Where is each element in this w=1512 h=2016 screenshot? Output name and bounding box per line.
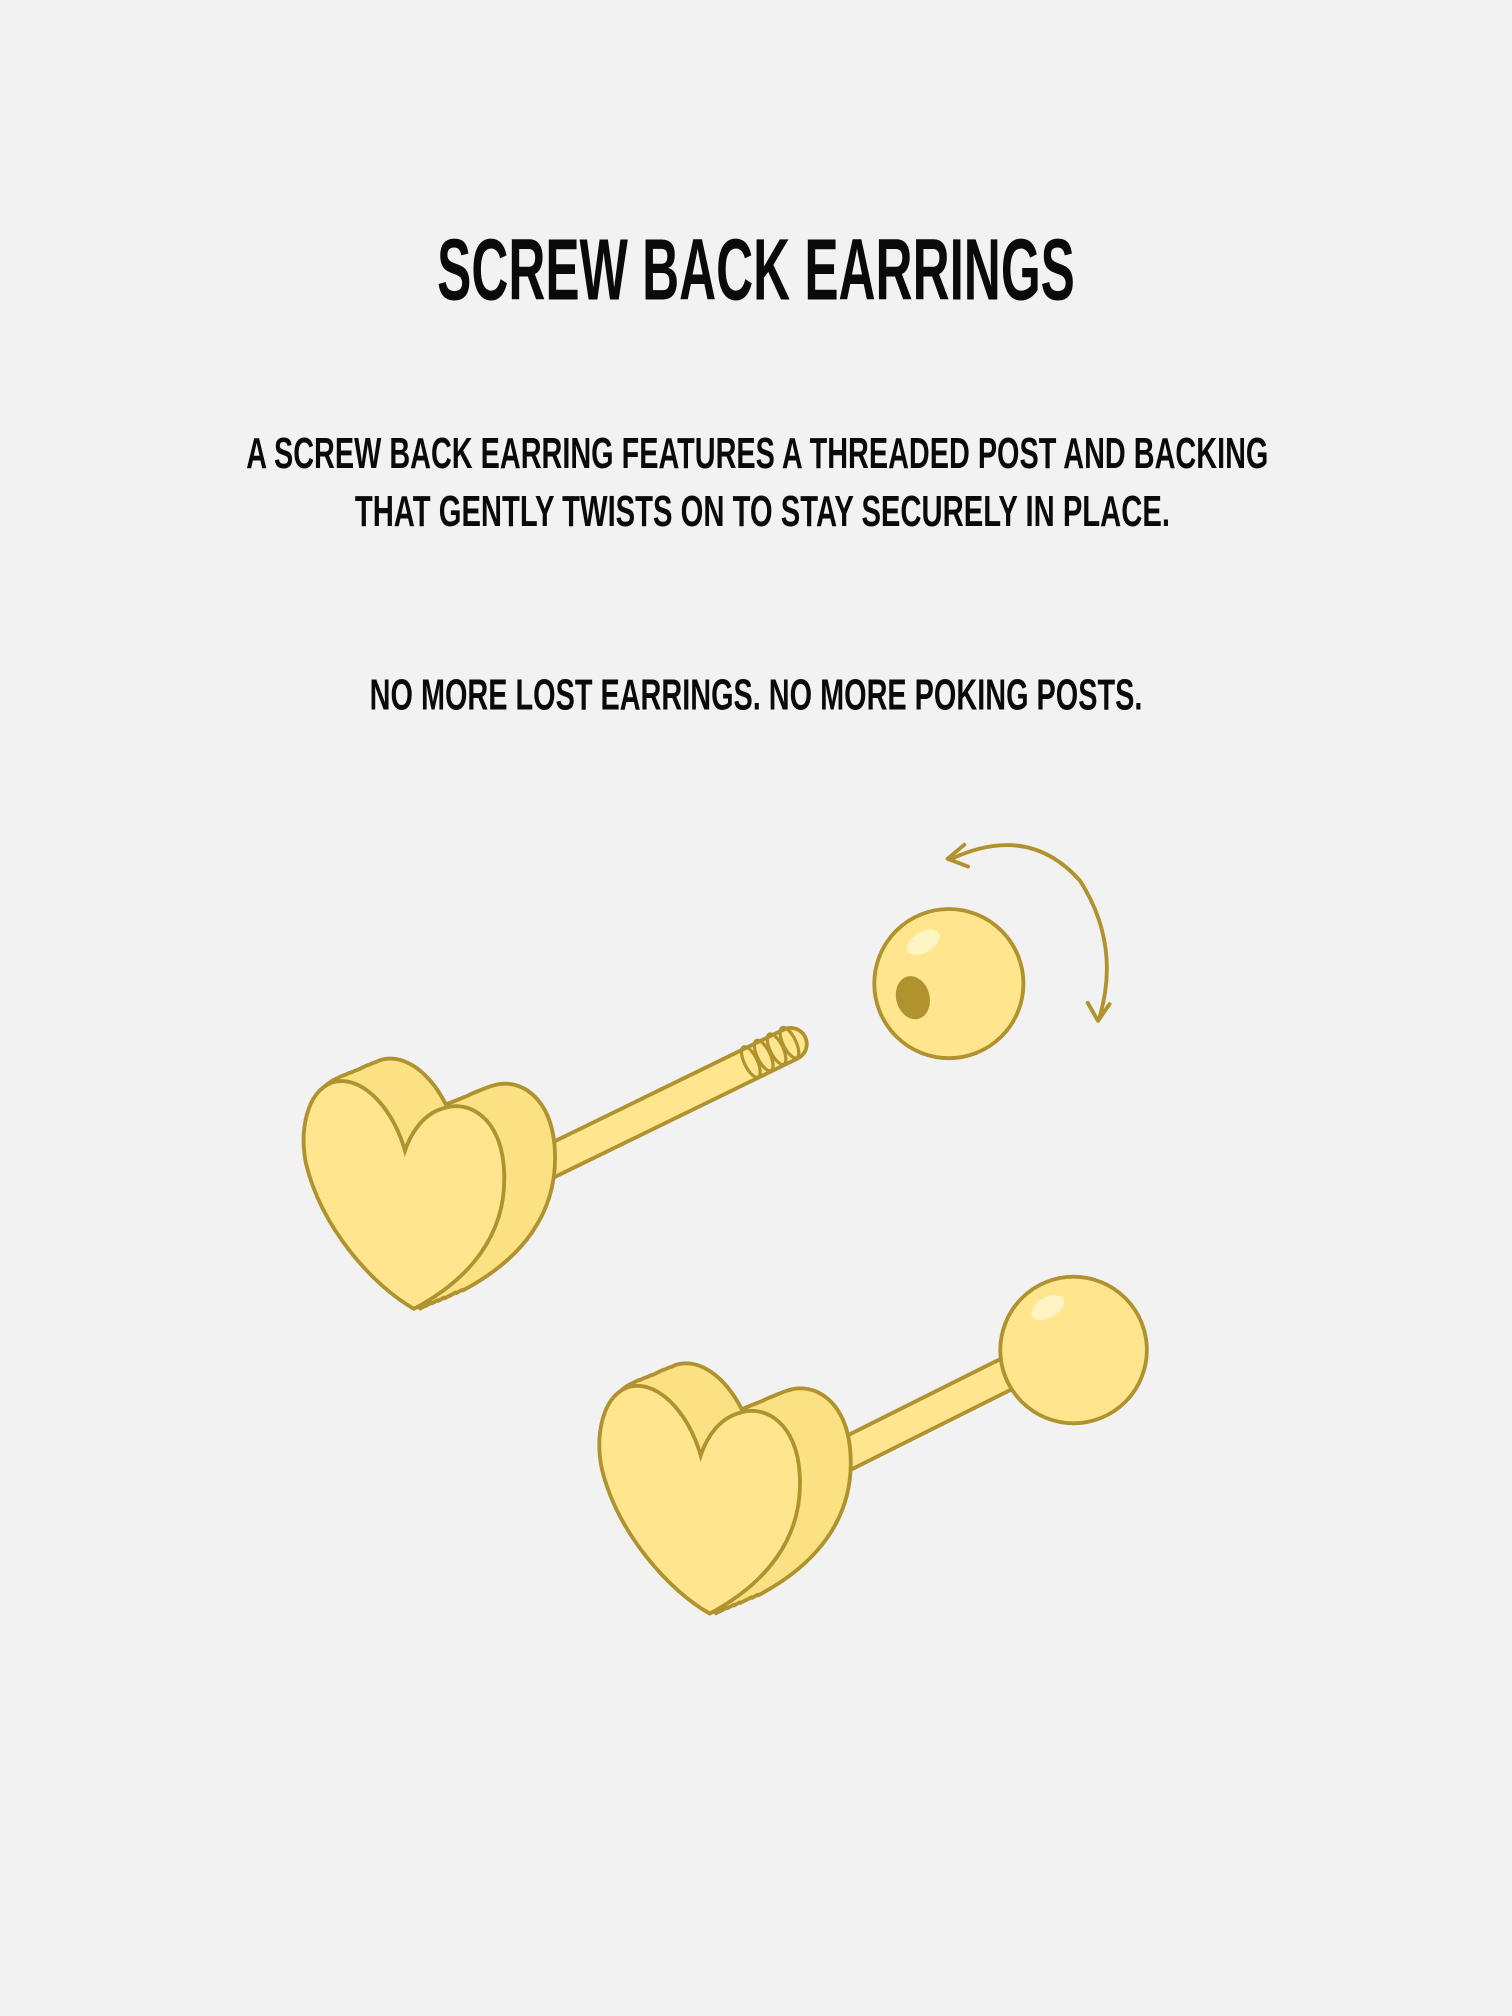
- ball back with hole: [874, 909, 1023, 1058]
- heart: [599, 1365, 849, 1614]
- heart: [304, 1060, 553, 1309]
- earring: unscrewed heart stud: [304, 1025, 803, 1309]
- description text: [246, 429, 1268, 536]
- title: SCREW BACK EARRINGS: [437, 221, 1075, 319]
- earring: assembled heart stud: [599, 1277, 1147, 1614]
- tagline: NO MORE LOST EARRINGS. NO MORE POKING POSTS.: [370, 671, 1142, 720]
- post with threads: [527, 1025, 803, 1173]
- post and ball: [823, 1277, 1147, 1466]
- arrow: twist: [948, 845, 1110, 1021]
